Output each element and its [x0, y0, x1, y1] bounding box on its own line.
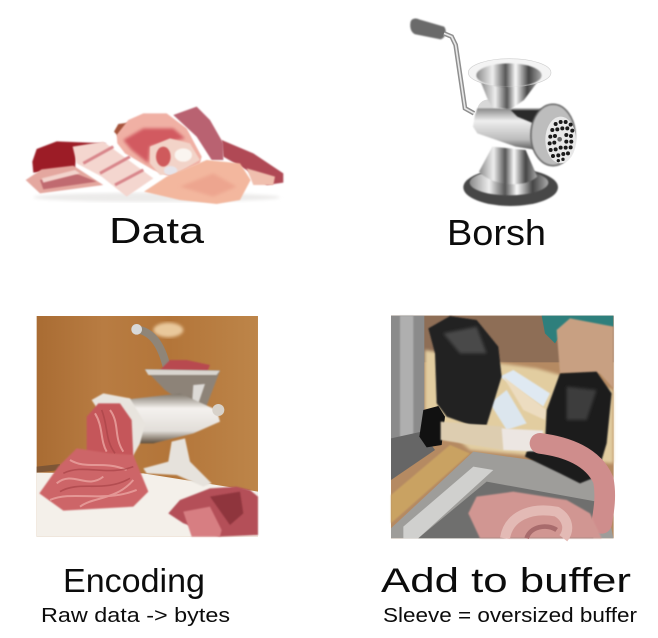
hopper: [481, 80, 539, 109]
body: [123, 393, 220, 443]
handle: [153, 323, 183, 337]
casing: [441, 422, 503, 450]
handle: [410, 19, 446, 39]
grinder plate: [531, 104, 575, 166]
wood board: [391, 445, 470, 523]
heading: Data: Data: [109, 210, 205, 251]
image: meat grinder: [410, 19, 576, 206]
machine: [391, 316, 424, 439]
sausage: [540, 443, 605, 523]
nozzle cap: [419, 406, 445, 447]
gloved hand left: [428, 316, 502, 425]
stand: [143, 438, 212, 487]
mince: [87, 403, 133, 457]
hopper: [145, 369, 220, 410]
photo: stuffing sausage: [391, 316, 614, 538]
heading: Borsh: Borsh: [447, 212, 546, 253]
image: raw meat pile: [26, 107, 283, 204]
heading: Encoding: Encoding: [63, 562, 205, 599]
gloved hand right: [525, 372, 612, 483]
tray: [391, 452, 613, 538]
caption: raw data to bytes: Raw data -> bytes: [41, 605, 230, 627]
base: [463, 169, 558, 206]
heading: Add to buffer: Add to buffer: [381, 562, 631, 600]
body: [477, 99, 501, 121]
photo: grinder producing mince: [37, 316, 258, 537]
cubes: [168, 487, 258, 537]
caption: sleeve equals oversized buffer: Sleeve = oversized buffer: [383, 605, 637, 627]
meat on hopper: [158, 360, 210, 374]
